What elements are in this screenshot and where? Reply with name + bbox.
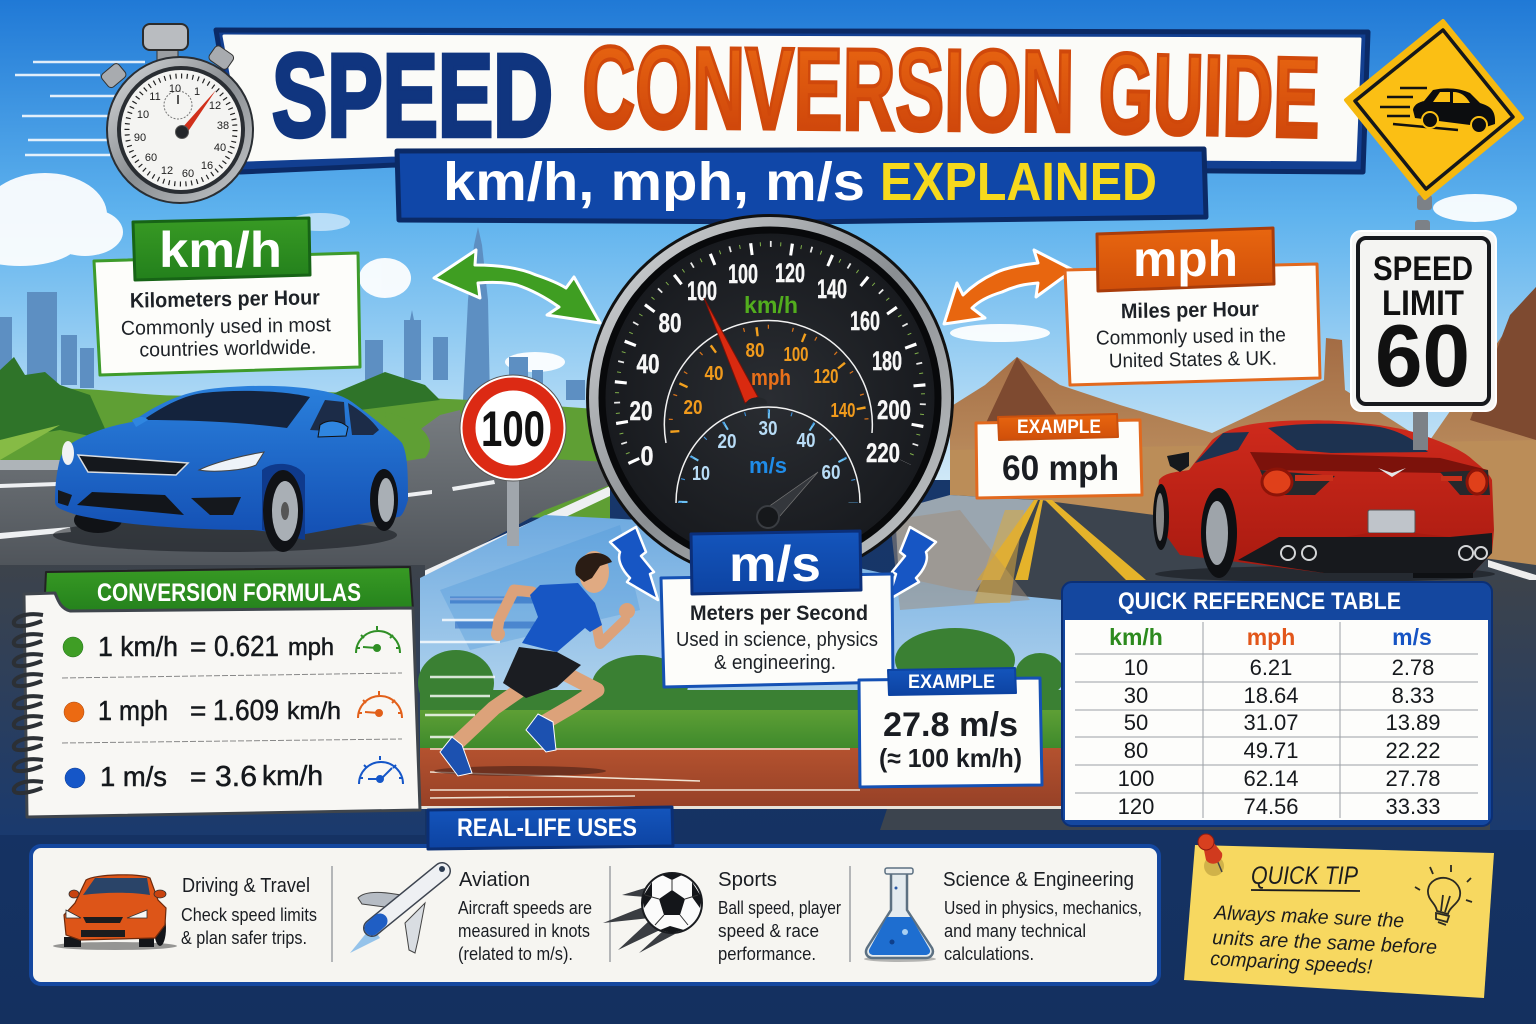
formula: mph: 1 mph xyxy=(98,695,168,726)
main dial numbers: 220 xyxy=(866,438,900,468)
formula: mph: 1.609 xyxy=(213,695,279,727)
needles xyxy=(704,298,758,403)
callout: example 60 mph: 60 mph xyxy=(1002,449,1119,488)
text: sports: Sports xyxy=(718,869,777,891)
road sign 100 xyxy=(460,375,566,546)
formula: m/s xyxy=(65,760,323,793)
text: driving: & plan safer trips. xyxy=(181,928,307,948)
main dial ticks xyxy=(617,244,923,463)
m/s tab: m/s xyxy=(729,536,821,592)
icon: light bulb xyxy=(1415,865,1472,925)
sticky note: quick tip xyxy=(1184,834,1494,998)
m/s description: Used in science, physics xyxy=(676,629,878,651)
speed limit sign: LIMIT xyxy=(1382,284,1464,323)
main dial numbers: 100 xyxy=(687,276,717,306)
table rows: 30 xyxy=(1124,683,1148,708)
table header: m/s xyxy=(1392,624,1432,650)
km/h tab xyxy=(133,218,310,280)
main dial numbers: 140 xyxy=(817,274,847,304)
formula: m/s: km/h xyxy=(262,760,323,791)
stopwatch: 16 xyxy=(201,160,213,172)
text: driving: Driving & Travel xyxy=(182,875,310,897)
table rows: 49.71 xyxy=(1243,738,1299,763)
mph tab xyxy=(1097,228,1274,291)
table rows: 10 xyxy=(1124,655,1148,680)
text: driving: Check speed limits xyxy=(181,905,317,925)
stopwatch: 10 xyxy=(137,109,149,121)
formulas header: CONVERSION FORMULAS xyxy=(97,579,361,607)
mph description: United States & UK. xyxy=(1109,348,1277,372)
table header: km/h xyxy=(1109,624,1163,650)
quick tip text: Always make sure the xyxy=(1213,902,1405,932)
stopwatch: 12 xyxy=(209,100,221,112)
icon: airplane xyxy=(350,866,445,953)
arrow: mph to gauge xyxy=(944,250,1073,324)
speed limit sign: 60 xyxy=(1375,306,1470,405)
table rows: 8.33 xyxy=(1392,683,1434,708)
table rows: 6.21 xyxy=(1250,655,1292,680)
panel: real-life uses xyxy=(31,807,1159,984)
panel: conversion formulas xyxy=(14,567,420,817)
m/s description: Meters per Second xyxy=(690,602,868,625)
warning sign xyxy=(1346,21,1522,210)
formula: km/h xyxy=(63,631,334,663)
formula: km/h: 1 km/h xyxy=(98,631,178,662)
quick tip text: QUICK TIP xyxy=(1251,862,1358,890)
mph tab: mph xyxy=(1133,231,1238,287)
m/s tab xyxy=(691,531,861,594)
speedometer gauge: 10 xyxy=(692,463,710,485)
callout: example 60 mph xyxy=(976,414,1142,498)
speedometer gauge: 30 xyxy=(758,418,778,440)
icon: mini gauge blue xyxy=(359,756,403,784)
speedometer gauge: 60 xyxy=(822,462,840,484)
text: science: calculations. xyxy=(944,944,1034,964)
speedometer gauge: 140 xyxy=(830,400,856,422)
main dial numbers: 0 xyxy=(640,441,654,471)
callout: example 60 mph: EXAMPLE xyxy=(1017,417,1101,438)
km/h description xyxy=(121,286,331,362)
subtitle banner: EXPLAINED xyxy=(880,152,1157,212)
table header: mph xyxy=(1247,624,1295,650)
quick tip text: comparing speeds! xyxy=(1210,948,1373,978)
icon: flask xyxy=(864,868,936,962)
main dial numbers: 20 xyxy=(630,396,652,426)
title text: GUIDE xyxy=(1097,30,1321,162)
text: aviation: Aviation xyxy=(459,869,530,891)
icon: pushpin xyxy=(1198,834,1224,876)
stopwatch: 11 xyxy=(149,91,161,103)
callout: example 27.8 m/s: EXAMPLE xyxy=(908,672,995,693)
main dial numbers xyxy=(630,258,911,471)
formula: km/h: mph xyxy=(288,634,334,661)
left road xyxy=(0,410,610,640)
runner scene xyxy=(418,510,1065,809)
mountains xyxy=(950,287,1536,520)
text: science: and many technical xyxy=(944,921,1086,941)
stopwatch: 12 xyxy=(161,165,173,177)
speed limit sign: SPEED xyxy=(1373,250,1473,288)
text: driving xyxy=(181,875,317,948)
stopwatch: 40 xyxy=(214,142,226,154)
km/h description: Commonly used in most xyxy=(121,314,331,340)
speedometer gauge: 20 xyxy=(718,431,736,453)
lower-left ground xyxy=(0,565,425,835)
stopwatch: 60 xyxy=(182,168,194,180)
speedometer gauge: 120 xyxy=(814,366,838,388)
table rows: 100 xyxy=(1118,766,1154,791)
speedometer gauge: 40 xyxy=(704,363,724,385)
table rows xyxy=(1118,655,1441,819)
text: aviation: measured in knots xyxy=(458,921,590,941)
text: sports: performance. xyxy=(718,944,816,964)
formula: mph: km/h xyxy=(287,698,341,725)
callout: example 27.8 m/s: (≈ 100 km/h) xyxy=(879,743,1022,773)
formula: km/h: = xyxy=(190,631,206,662)
text: aviation: Aircraft speeds are xyxy=(458,898,592,918)
table rows: 120 xyxy=(1118,794,1154,819)
text: sports: speed & race xyxy=(718,921,819,941)
main dial numbers: 180 xyxy=(872,346,902,376)
panel: quick reference table: QUICK REFERENCE TABLE xyxy=(1118,588,1401,615)
text: aviation xyxy=(458,869,592,964)
icon: mini gauge orange xyxy=(358,691,402,718)
callout: example 27.8 m/s xyxy=(859,668,1042,787)
left hills xyxy=(0,389,610,520)
text: science xyxy=(943,869,1142,964)
panel: m/s xyxy=(661,531,893,687)
formula: km/h: 0.621 xyxy=(214,631,279,663)
km/h description: countries worldwide. xyxy=(139,336,317,362)
quick tip text: units are the same before xyxy=(1212,927,1438,959)
panel: quick reference table xyxy=(1062,582,1492,826)
arrow: m/s circular, left xyxy=(610,527,658,600)
notebook binding xyxy=(14,614,43,793)
speedometer gauge: m/s xyxy=(749,453,787,478)
speedometer gauge: km/h xyxy=(744,292,798,318)
formula: m/s: 1 m/s xyxy=(100,761,167,792)
mph description xyxy=(1096,298,1286,372)
title banner xyxy=(216,22,1368,172)
subtitle banner: km/h, mph, m/s xyxy=(443,152,865,212)
stopwatch: 10 xyxy=(169,83,181,95)
stopwatch: 38 xyxy=(217,120,229,132)
main dial numbers: 100 xyxy=(728,259,758,289)
text: science: Science & Engineering xyxy=(943,869,1134,891)
title text: CONVERSION xyxy=(582,22,1075,156)
speedometer gauge: 100 xyxy=(784,344,808,366)
formula: m/s: 3.6 xyxy=(215,761,257,793)
table header xyxy=(1109,624,1432,650)
real-life tab xyxy=(428,807,673,849)
icon: blue car xyxy=(53,386,408,552)
m/s dial xyxy=(676,407,860,503)
table rows: 22.22 xyxy=(1385,738,1441,763)
icon: soccer ball xyxy=(603,873,702,953)
stopwatch: 1 xyxy=(194,86,200,98)
formula: m/s: = xyxy=(190,761,206,792)
formula: mph xyxy=(64,695,341,727)
table rows: 50 xyxy=(1124,710,1148,735)
table rows: 2.78 xyxy=(1392,655,1434,680)
km/h description: Kilometers per Hour xyxy=(130,286,320,313)
main dial numbers: 160 xyxy=(850,306,880,336)
icon: orange car xyxy=(53,875,177,950)
main dial numbers: 80 xyxy=(658,308,682,338)
table rows: 27.78 xyxy=(1385,766,1441,791)
stopwatch: 60 xyxy=(145,152,157,164)
lower-right ground xyxy=(1490,580,1536,830)
arrow: m/s circular, right xyxy=(888,527,936,600)
speedometer gauge: mph xyxy=(751,365,791,390)
speedometer gauge xyxy=(586,214,954,582)
table rows: 31.07 xyxy=(1243,710,1299,735)
text: science: Used in physics, mechanics, xyxy=(944,898,1142,918)
title text xyxy=(272,22,1321,162)
speed limit sign xyxy=(1351,220,1496,450)
icon: red sports car xyxy=(1153,420,1495,582)
mph description: Miles per Hour xyxy=(1121,298,1259,323)
text: sports: Ball speed, player xyxy=(718,898,841,918)
stopwatch xyxy=(15,24,253,203)
real-life tab: REAL-LIFE USES xyxy=(457,814,637,842)
icon: runner xyxy=(420,551,635,776)
m/s description: & engineering. xyxy=(714,652,836,674)
formulas header xyxy=(44,567,413,615)
table rows: 18.64 xyxy=(1243,683,1299,708)
road sign 100: 100 xyxy=(481,401,545,457)
table grid xyxy=(1075,622,1478,818)
speedometer gauge: 20 xyxy=(684,397,702,419)
table rows: 62.14 xyxy=(1243,766,1299,791)
table rows: 80 xyxy=(1124,738,1148,763)
table rows: 13.89 xyxy=(1385,710,1441,735)
arrow: km/h to gauge xyxy=(434,250,600,323)
formula: mph: = xyxy=(190,695,206,726)
panel: mph xyxy=(1065,228,1320,385)
skyline xyxy=(0,227,585,400)
speedometer gauge: 80 xyxy=(746,340,764,362)
title text: SPEED xyxy=(272,30,553,162)
text: aviation: (related to m/s). xyxy=(458,944,573,964)
icon: mini gauge green xyxy=(356,626,400,653)
main dial numbers: 40 xyxy=(636,349,660,379)
table rows: 74.56 xyxy=(1243,794,1299,819)
speedometer gauge: 40 xyxy=(796,430,816,452)
m/s description xyxy=(676,602,878,674)
right road xyxy=(880,495,1536,830)
km/h tab: km/h xyxy=(159,222,282,278)
subtitle banner xyxy=(397,149,1206,222)
callout: example 27.8 m/s: 27.8 m/s xyxy=(883,706,1018,744)
stopwatch: 90 xyxy=(134,132,146,144)
quick tip text xyxy=(1210,862,1438,978)
panel: km/h xyxy=(94,218,360,375)
mph dial xyxy=(664,321,872,443)
main dial numbers: 120 xyxy=(775,258,805,288)
text: sports xyxy=(718,869,841,964)
table rows: 33.33 xyxy=(1385,794,1441,819)
mph description: Commonly used in the xyxy=(1096,324,1286,350)
main dial numbers: 200 xyxy=(877,395,911,425)
